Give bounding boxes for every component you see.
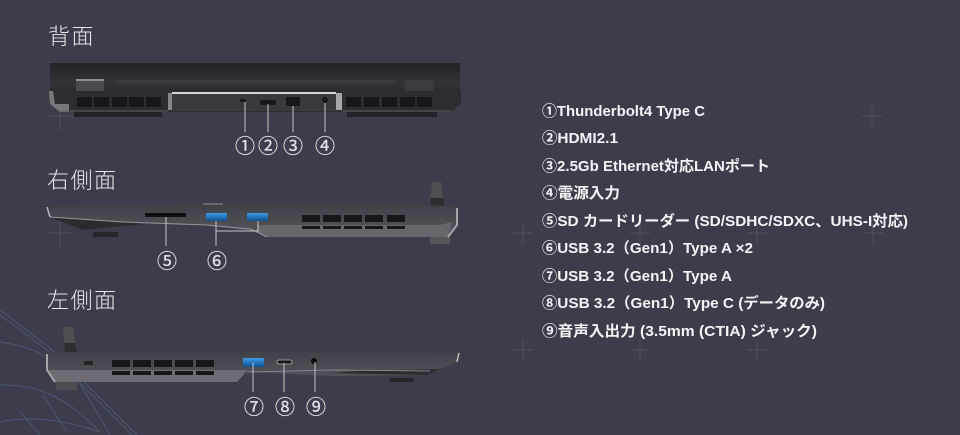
port list: ⑤SD カードリーダー (SD/SDHC/SDXC、UHS-I対応): [542, 212, 908, 230]
left side callouts 7-9: ⑨: [306, 391, 326, 420]
heading: left side: 左側面: [47, 283, 118, 315]
port list: ①Thunderbolt4 Type C: [542, 103, 705, 120]
right side callouts 5-6: ⑤: [157, 245, 177, 274]
port list: ②HDMI2.1: [542, 130, 618, 147]
rear view laptop: [49, 63, 461, 117]
port list: ⑨音声入出力 (3.5mm (CTIA) ジャック): [542, 322, 817, 340]
rear callouts 1-4: ①: [235, 130, 255, 159]
right side view laptop: [47, 182, 457, 244]
port list: [542, 103, 908, 340]
left side callouts 7-9: [244, 362, 326, 420]
port list: ⑦USB 3.2（Gen1）Type A: [542, 268, 732, 285]
rear callouts 1-4: ②: [258, 130, 278, 159]
left side callouts 7-9: ⑦: [244, 391, 264, 420]
port list: ⑧USB 3.2（Gen1）Type C (データのみ): [542, 294, 825, 312]
port list: ④電源入力: [542, 185, 620, 202]
left side callouts 7-9: ⑧: [275, 391, 295, 420]
heading: right side: 右側面: [47, 163, 118, 195]
port list: ③2.5Gb Ethernet対応LANポート: [542, 157, 770, 175]
port list: ⑥USB 3.2（Gen1）Type A ×2: [542, 240, 753, 257]
heading: rear: 背面: [48, 19, 95, 51]
right side callouts 5-6: ⑥: [207, 245, 227, 274]
right side callouts 5-6: [157, 217, 258, 274]
rear callouts 1-4: ③: [283, 130, 303, 159]
rear callouts 1-4: [235, 102, 335, 159]
left side view laptop: [47, 327, 459, 390]
rear callouts 1-4: ④: [315, 130, 335, 159]
